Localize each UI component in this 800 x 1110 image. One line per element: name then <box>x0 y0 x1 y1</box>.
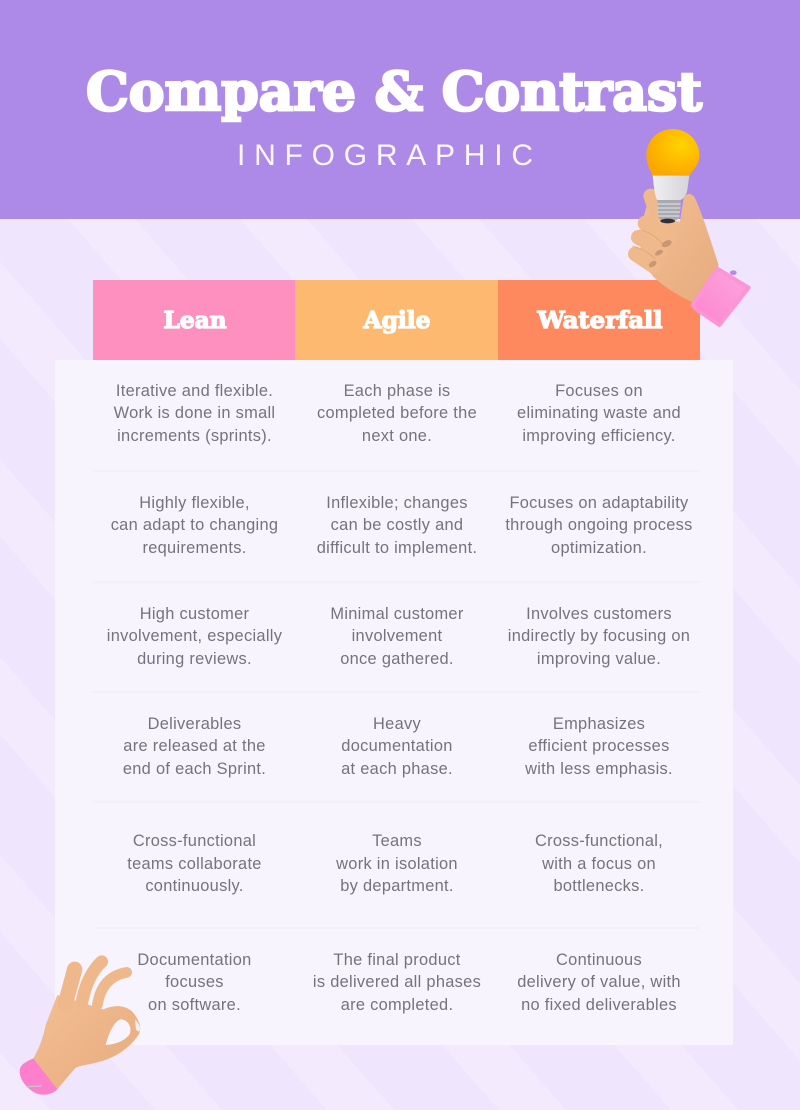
row 2 <box>111 494 693 557</box>
row 2: Inflexible; changes <box>326 494 468 512</box>
row 3 <box>107 605 690 668</box>
title: Compare & Contrast <box>86 61 703 123</box>
row 5: Cross-functional <box>133 832 256 850</box>
row 1: increments (sprints). <box>117 427 272 445</box>
row 6: is delivered all phases <box>313 973 481 991</box>
row 6: Documentation <box>137 951 252 969</box>
row 4: Heavy <box>373 715 421 733</box>
row 2: requirements. <box>142 539 247 557</box>
row 2: through ongoing process <box>505 516 693 534</box>
column header: Lean <box>93 280 295 360</box>
row 6: are completed. <box>341 996 453 1014</box>
comparison panel <box>55 360 733 1045</box>
row 3: improving value. <box>537 650 661 668</box>
row 6: no fixed deliverables <box>521 996 677 1014</box>
row 4: efficient processes <box>528 737 670 755</box>
column header: Agile <box>295 280 498 360</box>
row 2: Highly flexible, <box>139 494 250 512</box>
row 4: are released at the <box>123 737 266 755</box>
row 4 <box>123 715 673 778</box>
row 1: Each phase is <box>344 382 450 400</box>
row 2: can adapt to changing <box>111 516 278 534</box>
column header: Lean: Lean <box>164 307 227 334</box>
row 1: improving efficiency. <box>522 427 676 445</box>
row 6: on software. <box>148 996 241 1014</box>
row 4: with less emphasis. <box>524 760 673 778</box>
row 1 <box>114 382 681 445</box>
row 4: Deliverables <box>148 715 241 733</box>
row 2: Focuses on adaptability <box>509 494 689 512</box>
row 6: The final product <box>333 951 461 969</box>
row 3: involvement, especially <box>107 627 283 645</box>
row 5: Cross-functional, <box>535 832 663 850</box>
row 1: next one. <box>362 427 432 445</box>
row 4: end of each Sprint. <box>123 760 266 778</box>
row 5: bottlenecks. <box>553 877 645 895</box>
row 2: difficult to implement. <box>317 539 477 557</box>
column header: Agile: Agile <box>362 307 430 334</box>
row 1: Iterative and flexible. <box>116 382 273 400</box>
row 4: at each phase. <box>341 760 453 778</box>
row 6 <box>137 951 681 1014</box>
row 6: focuses <box>165 973 224 991</box>
icon: hand holding light bulb <box>632 129 749 325</box>
column header: Waterfall <box>498 280 700 360</box>
row 5: continuously. <box>145 877 244 895</box>
row 3: Involves customers <box>526 605 672 623</box>
row 5: by department. <box>340 877 454 895</box>
row 3: involvement <box>352 627 443 645</box>
row 5 <box>127 832 663 895</box>
row 5: work in isolation <box>335 855 458 873</box>
header band <box>0 0 800 219</box>
icon: hand making OK sign <box>20 962 140 1095</box>
row 1: completed before the <box>317 404 477 422</box>
row 1: Work is done in small <box>114 404 275 422</box>
row 1: eliminating waste and <box>517 404 681 422</box>
row 4: Emphasizes <box>553 715 645 733</box>
column header: Waterfall: Waterfall <box>536 307 663 334</box>
row 2: can be costly and <box>331 516 463 534</box>
row 5: teams collaborate <box>127 855 262 873</box>
row 2: optimization. <box>551 539 647 557</box>
row 3: Minimal customer <box>330 605 464 623</box>
row 3: indirectly by focusing on <box>508 627 690 645</box>
row 3: during reviews. <box>137 650 252 668</box>
row 3: once gathered. <box>340 650 454 668</box>
row 4: documentation <box>341 737 453 755</box>
subtitle: INFOGRAPHIC <box>237 139 533 172</box>
row 5: Teams <box>372 832 422 850</box>
row 6: delivery of value, with <box>517 973 681 991</box>
row 5: with a focus on <box>541 855 656 873</box>
row 3: High customer <box>140 605 250 623</box>
row 6: Continuous <box>556 951 642 969</box>
row 1: Focuses on <box>555 382 643 400</box>
